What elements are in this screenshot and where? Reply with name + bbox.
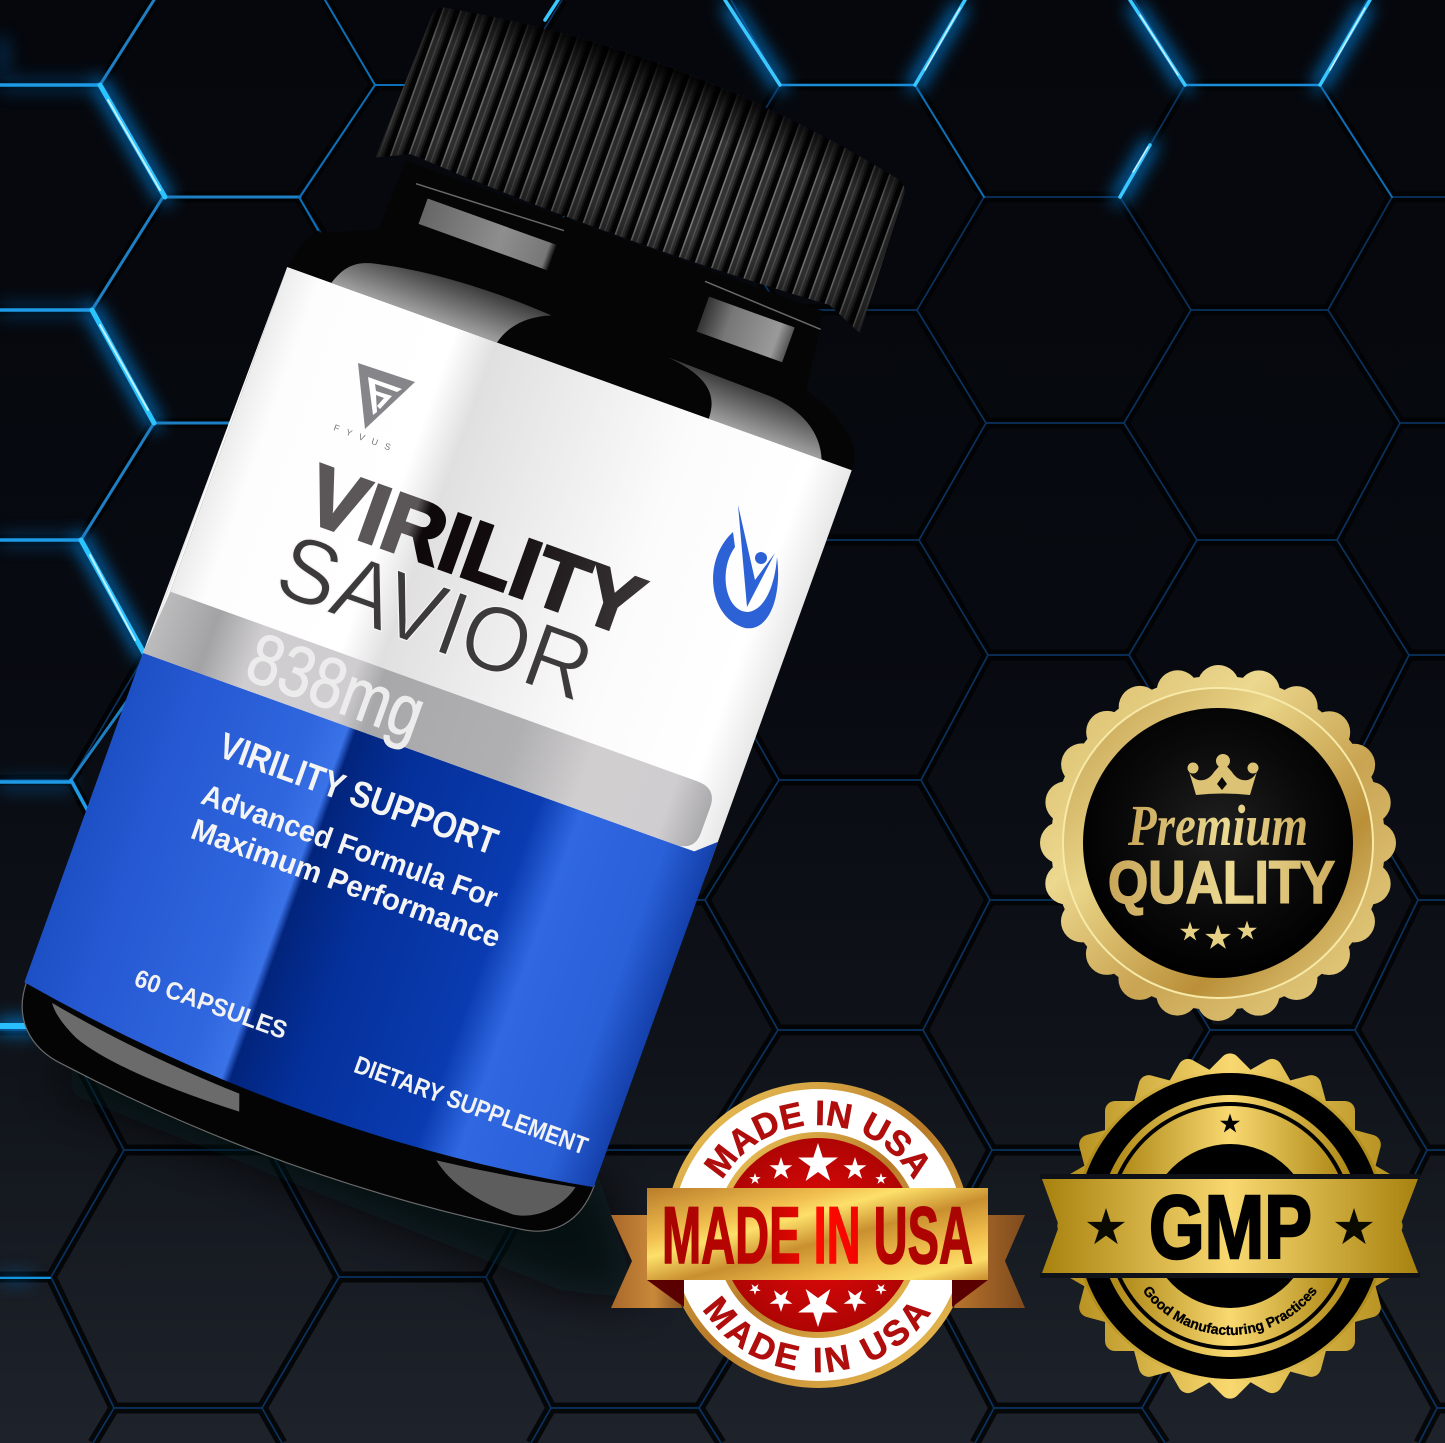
ribbon stars xyxy=(1087,1208,1373,1244)
brand name SAVIOR: SAVIOR xyxy=(264,515,606,721)
bottle shadow xyxy=(60,1000,640,1300)
bottle neck and shoulder xyxy=(286,135,899,472)
icon: FYVUS logo xyxy=(332,363,415,455)
ribbon tails xyxy=(611,1215,1025,1308)
white label area xyxy=(142,267,852,875)
rating stars xyxy=(1180,920,1257,949)
icon: FYVUS logo: FYVUS xyxy=(332,422,399,455)
GMP ribbon xyxy=(1042,1179,1418,1273)
blue label area xyxy=(15,637,718,1212)
brand name VIRILITY: VIRILITY xyxy=(295,447,655,654)
capsule count: 60 CAPSULES xyxy=(131,964,291,1045)
tagline line one: Advanced Formula For xyxy=(197,778,502,915)
ribbon xyxy=(647,1188,988,1280)
icon: crown xyxy=(1188,754,1258,795)
grey strength band xyxy=(143,590,717,851)
top star xyxy=(1220,1114,1240,1132)
badge: premium quality xyxy=(1051,676,1385,1010)
white stars xyxy=(749,1143,887,1327)
strength 838mg: 838mg xyxy=(237,618,435,755)
top arc text: MADE IN USA xyxy=(704,1100,928,1180)
bottom arc text: MADE IN USA xyxy=(702,1296,932,1372)
ribbon text: MADE IN USA xyxy=(662,1191,973,1281)
GMP text: GMP xyxy=(1149,1178,1312,1278)
premium script text: Premium xyxy=(1127,793,1308,858)
bottle cap xyxy=(375,0,922,333)
bottle base xyxy=(0,981,594,1263)
arc text: Good Manufacturing Practices xyxy=(1144,1286,1316,1336)
product bottle xyxy=(0,0,959,1263)
icon: blue V logo xyxy=(713,505,778,628)
tagline line two: Maximum Performance xyxy=(187,813,505,955)
bottle label xyxy=(15,265,852,1212)
quality text: QUALITY xyxy=(1108,849,1335,916)
dietary supplement: DIETARY SUPPLEMENT xyxy=(350,1051,591,1161)
badge: made in usa xyxy=(611,1082,1025,1388)
heading virility support: VIRILITY SUPPORT xyxy=(214,725,504,863)
badge: GMP xyxy=(1040,1053,1420,1399)
